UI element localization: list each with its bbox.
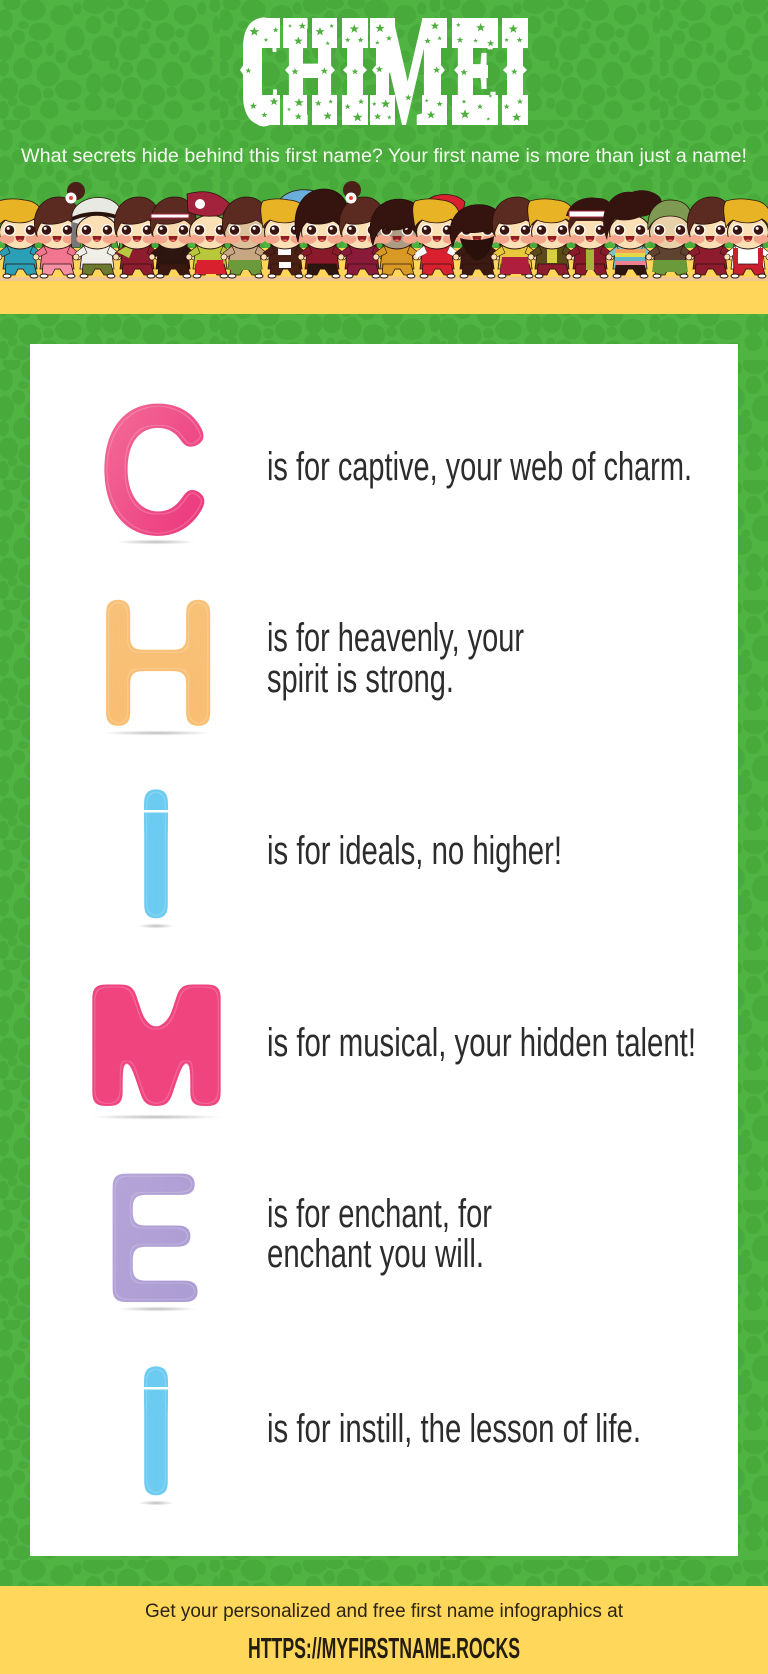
- footer text: Get your personalized and free first name infographics at: [145, 1601, 624, 1622]
- yellow ground band: [0, 248, 768, 314]
- letter M: M: [85, 953, 228, 1137]
- row: M: [85, 953, 696, 1137]
- child 13: [450, 205, 504, 278]
- child 4: [113, 197, 161, 278]
- child 19: [686, 197, 734, 278]
- child 7: [221, 197, 269, 278]
- child 15: [528, 199, 576, 278]
- shadow: [138, 1500, 174, 1506]
- footer: [0, 1586, 768, 1674]
- shadow: [117, 1306, 197, 1312]
- letter i: i: [138, 765, 174, 950]
- illustration: row of cartoon children: [0, 181, 768, 278]
- row: H: [96, 567, 524, 759]
- text: is for enchant, for: [267, 1192, 492, 1236]
- shadow: [138, 924, 174, 928]
- text: enchant you will.: [267, 1232, 484, 1276]
- child 18: [646, 200, 694, 278]
- shadow: [90, 1114, 222, 1120]
- child 20: [724, 199, 768, 278]
- text: is for heavenly, your: [267, 616, 524, 660]
- child 16: [566, 198, 614, 278]
- child 8: [261, 190, 317, 278]
- letter i: i: [138, 1342, 174, 1527]
- footer url: HTTPS://MYFIRSTNAME.ROCKS: [248, 1633, 520, 1665]
- child 6: [186, 192, 234, 278]
- panel background: [30, 344, 738, 1556]
- letter E: E: [104, 1140, 201, 1336]
- text: is for instill, the lesson of life.: [267, 1407, 641, 1451]
- row: E: [104, 1140, 492, 1336]
- text: spirit is strong.: [267, 657, 454, 701]
- letter H: H: [96, 567, 220, 759]
- header: [21, 0, 747, 167]
- footer background: [0, 1586, 768, 1674]
- row: C: [102, 374, 692, 566]
- text: is for ideals, no higher!: [267, 829, 562, 873]
- child 9: [295, 189, 349, 278]
- child 14: [491, 197, 539, 278]
- child 11: [370, 199, 424, 278]
- row: i (second): [138, 1342, 641, 1527]
- child 1: [0, 199, 44, 278]
- shadow: [102, 730, 212, 736]
- child 5: [149, 197, 197, 278]
- shadow: [116, 540, 196, 544]
- child 17: [603, 190, 662, 278]
- child 12: [413, 194, 465, 278]
- child 2: [33, 182, 85, 278]
- title: CHIMEI: [240, 0, 528, 156]
- subtitle: What secrets hide behind this first name? Your first name is more than just a name!: [21, 145, 747, 167]
- row: i: [138, 765, 562, 950]
- panel: letters: [30, 344, 738, 1556]
- letter C: C: [102, 374, 207, 566]
- child 3: [72, 197, 122, 278]
- child 10: [338, 181, 386, 278]
